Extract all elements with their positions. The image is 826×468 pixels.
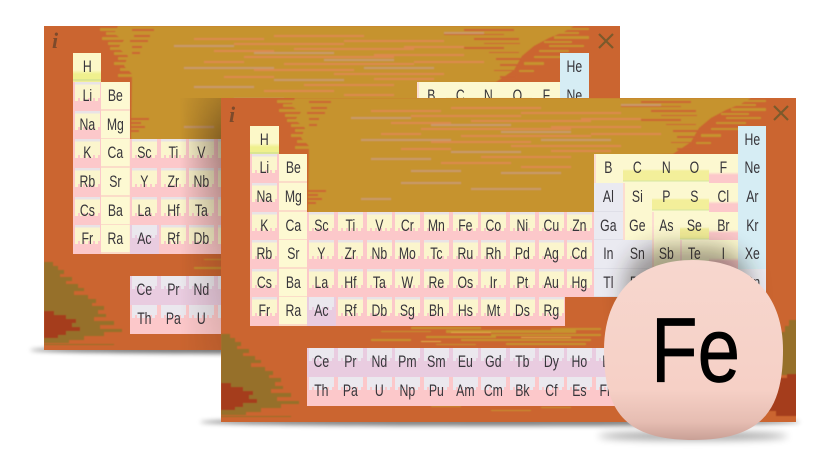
table: back main elements: O [513, 86, 522, 105]
table: back main elements: Fr [81, 229, 93, 248]
table: f-block: Dy [544, 352, 559, 371]
table: back main elements: Ne [567, 86, 583, 105]
table: back main elements: Sr [110, 172, 122, 191]
table: back main elements: Cs [80, 201, 95, 220]
table: back main elements: Si [455, 115, 465, 134]
table: main elements: Nb [371, 244, 387, 263]
table: main elements: Bh [429, 301, 444, 320]
table: back main elements: Mt [310, 229, 323, 248]
table: back main elements: P [485, 115, 493, 134]
table: back f-block: Cm [307, 309, 326, 328]
table: main elements: Pt [517, 273, 528, 292]
table: main elements: B [604, 158, 613, 177]
table: back main elements: Sb [481, 172, 496, 191]
table: main elements: Rg [543, 301, 559, 320]
table: back f-block: Md [451, 309, 469, 328]
table: back main elements: H [83, 57, 91, 76]
table: main elements: Au [544, 273, 559, 292]
table: back main elements: S [513, 115, 521, 134]
table: back main elements: W [225, 201, 236, 220]
table: main elements: H [260, 130, 269, 149]
table: main elements: Rn [744, 273, 760, 292]
table: back f-block: Fm [422, 309, 440, 328]
table: back f-block: Cf [368, 309, 380, 328]
table: main elements: Cs [257, 273, 272, 292]
table: f-block: Lu [688, 352, 701, 371]
table: back main elements: Ga [423, 143, 439, 162]
table: back main elements: Fe [281, 143, 295, 162]
table: main elements [250, 126, 766, 326]
panel: front periodic table window [221, 98, 796, 422]
table: back main elements: Ar [569, 115, 581, 134]
table: f-block: Pr [344, 352, 356, 371]
table: back main elements: K [83, 143, 91, 162]
table: main elements: Po [687, 273, 702, 292]
table: f-block: Cf [545, 381, 557, 400]
table: f-block: Ho [572, 352, 588, 371]
table: f-block: Es [573, 381, 587, 400]
table: f-block: Eu [458, 352, 473, 371]
table: back main elements: Zr [167, 172, 179, 191]
table: main elements: Kr [746, 216, 758, 235]
table: main elements: In [603, 244, 614, 263]
table: f-block: Th [314, 381, 329, 400]
table: main elements: Ti [345, 216, 355, 235]
table: main elements: Cd [572, 244, 588, 263]
table: back main elements: Pb [452, 201, 467, 220]
table: back main elements: Rb [79, 172, 95, 191]
table: back f-block: Np [223, 309, 238, 328]
table: back main elements: He [567, 57, 583, 76]
table: main elements: Fr [258, 301, 270, 320]
table: back main elements: Co [309, 143, 324, 162]
table: main elements: Li [259, 158, 269, 177]
table: back main elements: Al [426, 115, 437, 134]
table: back main elements: Rh [309, 172, 324, 191]
table: back main elements: F [542, 86, 550, 105]
table: f-block: Nd [371, 352, 387, 371]
table: f-block [307, 348, 701, 406]
table: back main elements: Au [366, 201, 381, 220]
table: main elements: Sn [630, 244, 645, 263]
tile label: Fe [651, 300, 740, 402]
table: main elements: Tc [430, 244, 442, 263]
table: back main elements: As [482, 143, 496, 162]
table: main elements: Mg [284, 187, 301, 206]
table: main elements: He [744, 130, 760, 149]
table: back main elements [73, 53, 589, 254]
table: back main elements: At [540, 201, 552, 220]
table: main elements: Mn [428, 216, 445, 235]
table: back main elements: Tc [253, 172, 265, 191]
table: back f-block [130, 276, 524, 334]
table: back f-block: Nd [194, 280, 210, 299]
table: back main elements: Ge [452, 143, 468, 162]
table: main elements: Al [603, 187, 614, 206]
table: back main elements: Ni [339, 143, 351, 162]
table: main elements: Be [285, 158, 300, 177]
table: back f-block: Pa [166, 309, 181, 328]
table: main elements: Ar [746, 187, 758, 206]
table: back main elements: Br [540, 143, 552, 162]
table: main elements: Rh [486, 244, 502, 263]
table: main elements: W [402, 273, 413, 292]
table: main elements: Pb [630, 273, 645, 292]
table: main elements: Na [256, 187, 272, 206]
table: main elements: Ga [600, 216, 617, 235]
table: back main elements: Pd [338, 172, 353, 191]
table: back main elements: Ra [108, 229, 124, 248]
table: back main elements: Ds [338, 229, 353, 248]
table: f-block: Pm [399, 352, 417, 371]
table: back main elements: Nb [194, 172, 210, 191]
table: back main elements: Cu [366, 143, 382, 162]
table: back main elements: Sc [137, 143, 152, 162]
table: back main elements: Ba [108, 201, 123, 220]
background texture: front panel [221, 98, 796, 418]
table: back main elements: Sg [223, 229, 238, 248]
table: back main elements: Be [108, 86, 123, 105]
table: main elements: Ni [517, 216, 528, 235]
table: main elements: Mt [487, 301, 501, 320]
table: back main elements: Ta [195, 201, 208, 220]
table: main elements: Zn [573, 216, 587, 235]
table: back main elements: Ir [313, 201, 320, 220]
table: back main elements: Rg [366, 229, 382, 248]
table: back main elements: Li [82, 86, 92, 105]
table: back f-block: Tb [338, 280, 352, 299]
table: f-block: Md [629, 381, 646, 400]
icon: info: i [52, 28, 58, 53]
table: main elements: As [659, 216, 673, 235]
table: f-block: Am [456, 381, 474, 400]
table: main elements: Ta [373, 273, 385, 292]
table: back main elements: Bi [483, 201, 494, 220]
table: main elements: Re [429, 273, 444, 292]
table: back main elements: N [484, 86, 493, 105]
icon: close [598, 33, 614, 49]
table: back f-block: U [197, 309, 206, 328]
table: back main elements: Te [511, 172, 524, 191]
icon: Fe element tile [598, 232, 788, 445]
table: back f-block: Sm [250, 280, 268, 299]
table: back f-block: Pu [252, 309, 267, 328]
table: main elements: F [719, 158, 727, 177]
table: back main elements: Y [140, 172, 148, 191]
table: back f-block: Er [425, 280, 437, 299]
table: main elements: Sr [287, 244, 299, 263]
table: back main elements: In [426, 172, 436, 191]
table: main elements: S [690, 187, 699, 206]
table: back f-block: Es [395, 309, 410, 328]
table: back f-block: Gd [308, 280, 325, 299]
table: back main elements: Hs [280, 229, 295, 248]
table: back main elements: Bh [252, 229, 267, 248]
table: back main elements: Sn [452, 172, 467, 191]
table: back main elements: Hg [395, 201, 410, 220]
table: back main elements: Po [510, 201, 525, 220]
table: back main elements: Cr [224, 143, 237, 162]
table: back main elements: Xe [567, 172, 582, 191]
table: main elements: At [717, 273, 729, 292]
table: back f-block: Eu [280, 280, 295, 299]
table: back f-block: Pr [167, 280, 179, 299]
table: back main elements: B [427, 86, 435, 105]
table: back f-block: Th [137, 309, 152, 328]
table: back main elements: Re [251, 201, 267, 220]
table: back f-block: Bk [338, 309, 352, 328]
table: back main elements: I [544, 172, 548, 191]
table: main elements: Cl [717, 187, 729, 206]
table: back main elements: Rn [567, 201, 583, 220]
table: f-block: Gd [486, 352, 502, 371]
table: back main elements: Hf [167, 201, 179, 220]
table: main elements: Fe [458, 216, 472, 235]
table: back main elements: Kr [569, 143, 581, 162]
table: f-block: Sm [427, 352, 446, 371]
table: main elements: V [375, 216, 383, 235]
table: back main elements: Ca [108, 143, 124, 162]
table: back main elements: Zn [395, 143, 410, 162]
table: f-block: Cm [484, 381, 503, 400]
table: back main elements: V [198, 143, 206, 162]
table: main elements: La [315, 273, 328, 292]
table: back f-block: Pm [221, 280, 240, 299]
table: main elements: Zr [345, 244, 356, 263]
table: f-block: Pu [429, 381, 444, 400]
table: main elements: Ag [544, 244, 559, 263]
table: f-block: Ce [314, 352, 329, 371]
table: back f-block: Lr [512, 309, 523, 328]
table: main elements: Rf [344, 301, 356, 320]
table: main elements: K [260, 216, 268, 235]
table: back main elements: Ac [137, 229, 152, 248]
icon: info: i [229, 102, 235, 127]
table: main elements: Cr [401, 216, 414, 235]
table: back main elements: Db [194, 229, 210, 248]
table: main elements: O [690, 158, 699, 177]
table: f-block: Tb [515, 352, 530, 371]
table: back f-block: Lu [511, 280, 524, 299]
table: back main elements: Se [510, 143, 525, 162]
table: f-block: Lr [689, 381, 700, 400]
table: back main elements: Mn [251, 143, 268, 162]
table: main elements: Mo [399, 244, 416, 263]
table: f-block: Er [602, 352, 615, 371]
table: main elements: P [662, 187, 670, 206]
table: back main elements: Na [79, 115, 95, 134]
table: back main elements: Mg [107, 115, 124, 134]
table: back main elements: Tl [426, 201, 436, 220]
table: main elements: Sb [658, 244, 673, 263]
table: f-block: No [658, 381, 674, 400]
table: main elements: Sg [400, 301, 415, 320]
panel: back periodic table window [44, 26, 620, 350]
background texture: back panel [44, 26, 590, 346]
table: f-block: U [375, 381, 383, 400]
table: main elements: Os [457, 273, 473, 292]
table: main elements: Y [318, 244, 326, 263]
table: main elements: Db [371, 301, 387, 320]
shadow cast by front panel [180, 98, 221, 350]
table: main elements: Tl [603, 273, 614, 292]
table: back main elements: C [456, 86, 464, 105]
table: main elements: Sc [314, 216, 329, 235]
table: main elements: Ca [285, 216, 301, 235]
icon: close [773, 105, 789, 121]
table: main elements: Hg [572, 273, 588, 292]
table: back f-block: No [481, 309, 497, 328]
table: main elements: Ac [314, 301, 329, 320]
table: back f-block: Dy [366, 280, 381, 299]
table: main elements: Hf [344, 273, 356, 292]
table: main elements: Co [486, 216, 502, 235]
table: main elements: Bi [660, 273, 671, 292]
table: main elements: I [722, 244, 725, 263]
table: main elements: Rb [256, 244, 272, 263]
table: main elements: Ds [515, 301, 530, 320]
table: main elements: Ir [490, 273, 497, 292]
table: f-block: Np [400, 381, 416, 400]
table: back main elements: Cd [395, 172, 410, 191]
table: main elements: Ba [285, 273, 300, 292]
table: main elements: Ne [744, 158, 760, 177]
table: back main elements: Ag [366, 172, 381, 191]
table: main elements: Ge [629, 216, 645, 235]
table: main elements: C [633, 158, 642, 177]
table: main elements: Hs [458, 301, 473, 320]
table: main elements: Ru [457, 244, 473, 263]
table: main elements: Ra [285, 301, 301, 320]
table: back main elements: La [138, 201, 151, 220]
table: main elements: Br [717, 216, 729, 235]
table: back main elements: Ru [280, 172, 296, 191]
table: main elements: Te [688, 244, 701, 263]
table: main elements: Xe [744, 244, 759, 263]
table: back f-block: Tm [451, 280, 469, 299]
table: f-block: Tm [628, 352, 646, 371]
table: back main elements: Cl [540, 115, 552, 134]
table: back main elements: Rf [167, 229, 179, 248]
table: back main elements: Mo [222, 172, 239, 191]
table: back f-block: Ho [395, 280, 410, 299]
table: main elements: Se [687, 216, 702, 235]
table: back f-block: Ce [137, 280, 152, 299]
table: main elements: Cu [543, 216, 559, 235]
table: back main elements: Os [280, 201, 296, 220]
table: back f-block: Am [279, 309, 297, 328]
table: f-block: Yb [658, 352, 673, 371]
table: f-block: Fm [600, 381, 617, 400]
table: back main elements: Ti [168, 143, 178, 162]
table: back f-block: Yb [481, 280, 496, 299]
table: main elements: Si [632, 187, 643, 206]
table: main elements: N [661, 158, 670, 177]
table: f-block: Pa [343, 381, 358, 400]
table: back main elements: Pt [339, 201, 351, 220]
table: f-block: Bk [515, 381, 530, 400]
table: main elements: Pd [515, 244, 530, 263]
